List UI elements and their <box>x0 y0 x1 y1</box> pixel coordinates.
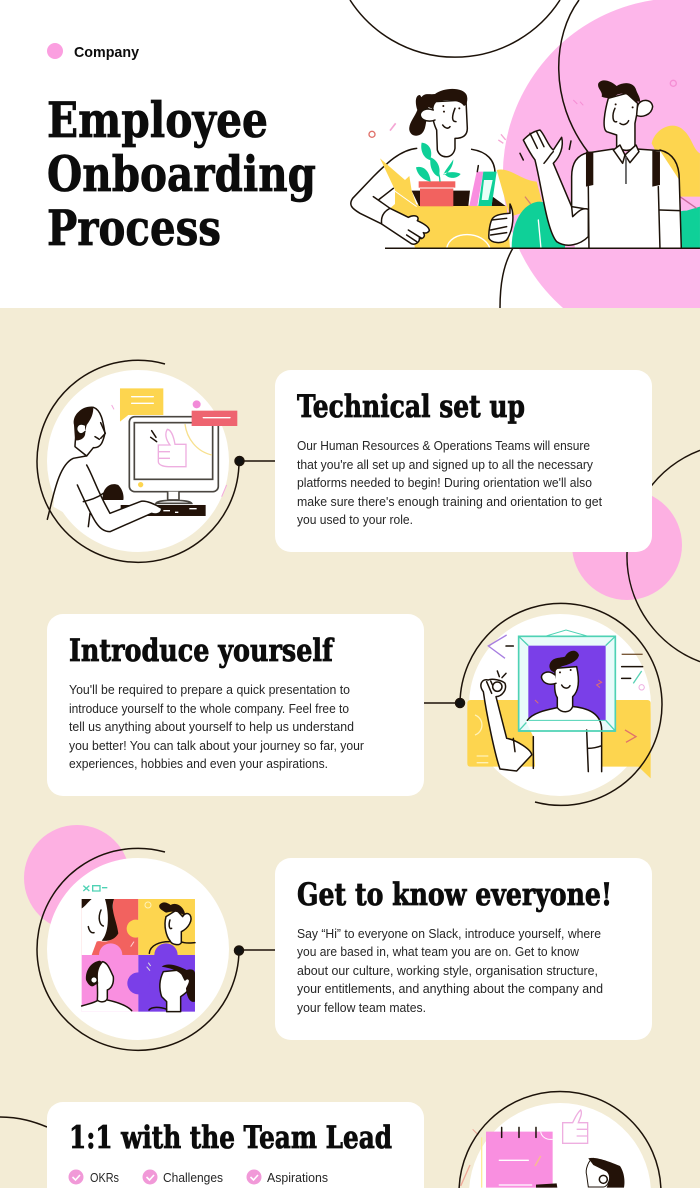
panel: introduce yourself: you better! You can talk about your journey so far, your <box>69 739 364 753</box>
panel: get to know everyone <box>275 858 652 1040</box>
header right arc <box>559 0 588 152</box>
title: Process <box>47 199 221 257</box>
step 1 white circle <box>47 370 229 552</box>
header lower arc <box>500 248 513 308</box>
panel: technical set up: you used to your role. <box>297 513 413 527</box>
panel: get to know everyone: Say “Hi” to everyone on Slack, introduce yourself, where <box>297 927 601 941</box>
panel: get to know everyone: your entitlements, and anything about the company and <box>297 982 603 996</box>
panel: introduce yourself: experiences, hobbies and even your aspirations. <box>69 757 328 771</box>
panel: get to know everyone: your fellow team mates. <box>297 1001 426 1015</box>
icon: four people puzzle <box>82 886 195 1012</box>
panel: technical set up: that you're all set up and signed up to all the necessary <box>297 458 594 472</box>
step 3 black arc and connector <box>37 848 275 1050</box>
company label <box>47 43 140 61</box>
header background <box>0 0 700 308</box>
icon: man in picture frame <box>467 630 651 778</box>
step 1 black arc and connector <box>37 360 275 562</box>
panel: introduce yourself: Introduce yourself <box>69 633 334 669</box>
panel: 1:1 with the team lead: Challenges <box>163 1171 223 1185</box>
section background <box>0 308 700 1188</box>
panel: 1:1 with the team lead: OKRs <box>90 1171 119 1185</box>
decorative pink circle left <box>24 825 130 931</box>
panel: technical set up: Our Human Resources & Operations Teams will ensure <box>297 439 590 453</box>
hero illustration: woman with box and waving man <box>351 80 700 248</box>
panel: get to know everyone: Get to know everyone! <box>297 877 612 913</box>
step 2 black arc and connector <box>424 603 662 805</box>
step 3 white circle <box>47 858 229 1040</box>
step 4 white circle <box>469 1103 651 1188</box>
icon: notepad and woman <box>461 1110 625 1188</box>
company label: Company <box>74 44 140 61</box>
panel: technical set up: make sure there's enough training and orientation to get <box>297 495 603 509</box>
title: Employee <box>47 91 268 149</box>
panel: get to know everyone: you are based in, what team you are on. Get to know <box>297 945 580 959</box>
panel: technical set up: platforms needed to begin! During orientation we'll also <box>297 476 592 490</box>
panel: 1:1 with the team lead: Aspirations <box>267 1171 328 1185</box>
header pink circle <box>503 0 700 308</box>
panel: technical set up: Technical set up <box>297 389 525 425</box>
panel: technical set up <box>275 370 652 552</box>
panel: introduce yourself: introduce yourself to the whole company. Feel free to <box>69 702 349 716</box>
panel: introduce yourself: tell us anything about yourself to help us understand <box>69 720 354 734</box>
panel: 1:1 with the team lead <box>47 1102 424 1188</box>
panel: 1:1 with the team lead: 1:1 with the Team Lead <box>69 1120 392 1156</box>
icon: person at computer <box>47 388 237 532</box>
panel: get to know everyone: about our culture, working style, organisation structure, <box>297 964 598 978</box>
panel: introduce yourself: You'll be required to prepare a quick presentation to <box>69 683 350 697</box>
header top arc <box>350 0 560 57</box>
title: Onboarding <box>47 145 316 203</box>
panel: introduce yourself <box>47 614 424 796</box>
right arc <box>627 450 700 662</box>
step 4 black arc <box>459 1091 661 1188</box>
step 2 white circle <box>469 614 651 796</box>
title <box>47 91 316 257</box>
bottom left arc <box>0 1117 47 1127</box>
decorative pink circle right <box>572 490 682 600</box>
